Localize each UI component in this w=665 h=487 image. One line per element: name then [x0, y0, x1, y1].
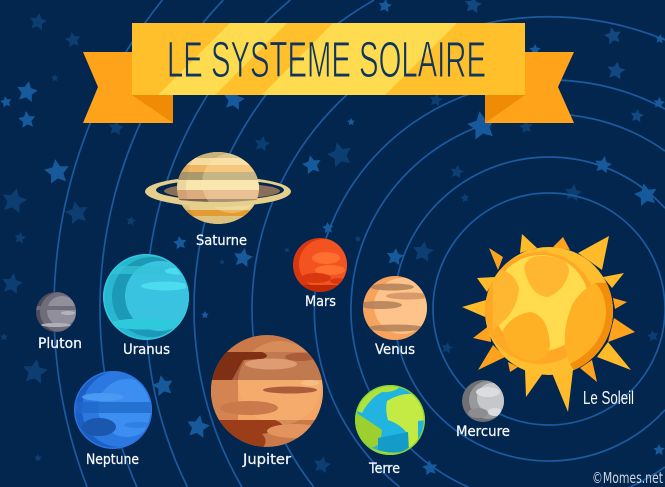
- planet: Pluton: [36, 292, 76, 332]
- sun rays: [462, 234, 635, 412]
- planet: Terre: [355, 385, 425, 455]
- label: Saturne: Saturne: [196, 233, 247, 249]
- rings front: [145, 192, 291, 207]
- planet: Uranus: [103, 254, 189, 340]
- sun: [462, 234, 635, 412]
- title banner: [83, 23, 574, 123]
- sun disc: [485, 247, 613, 375]
- planet: Neptune: [74, 371, 152, 449]
- planet: Mercure: [462, 380, 504, 422]
- left ribbon tail: [83, 52, 173, 123]
- right ribbon tail: [485, 52, 574, 123]
- label: Terre: Terre: [368, 461, 400, 477]
- label: Jupiter: Jupiter: [242, 452, 291, 468]
- planet: Jupiter: [211, 335, 323, 447]
- globe: [177, 152, 259, 224]
- label: Neptune: Neptune: [86, 452, 139, 468]
- label: Uranus: Uranus: [123, 342, 170, 358]
- label: Pluton: Pluton: [38, 336, 82, 352]
- label: Mercure: Mercure: [456, 424, 510, 440]
- planet: Saturne: [145, 150, 291, 230]
- rings back: [145, 176, 291, 206]
- label: Venus: Venus: [375, 342, 415, 358]
- label: Mars: Mars: [305, 294, 336, 310]
- label: Le Soleil: Le Soleil: [583, 388, 634, 408]
- planet: Venus: [363, 276, 427, 340]
- banner body: [132, 23, 525, 95]
- planet: Mars: [293, 238, 347, 292]
